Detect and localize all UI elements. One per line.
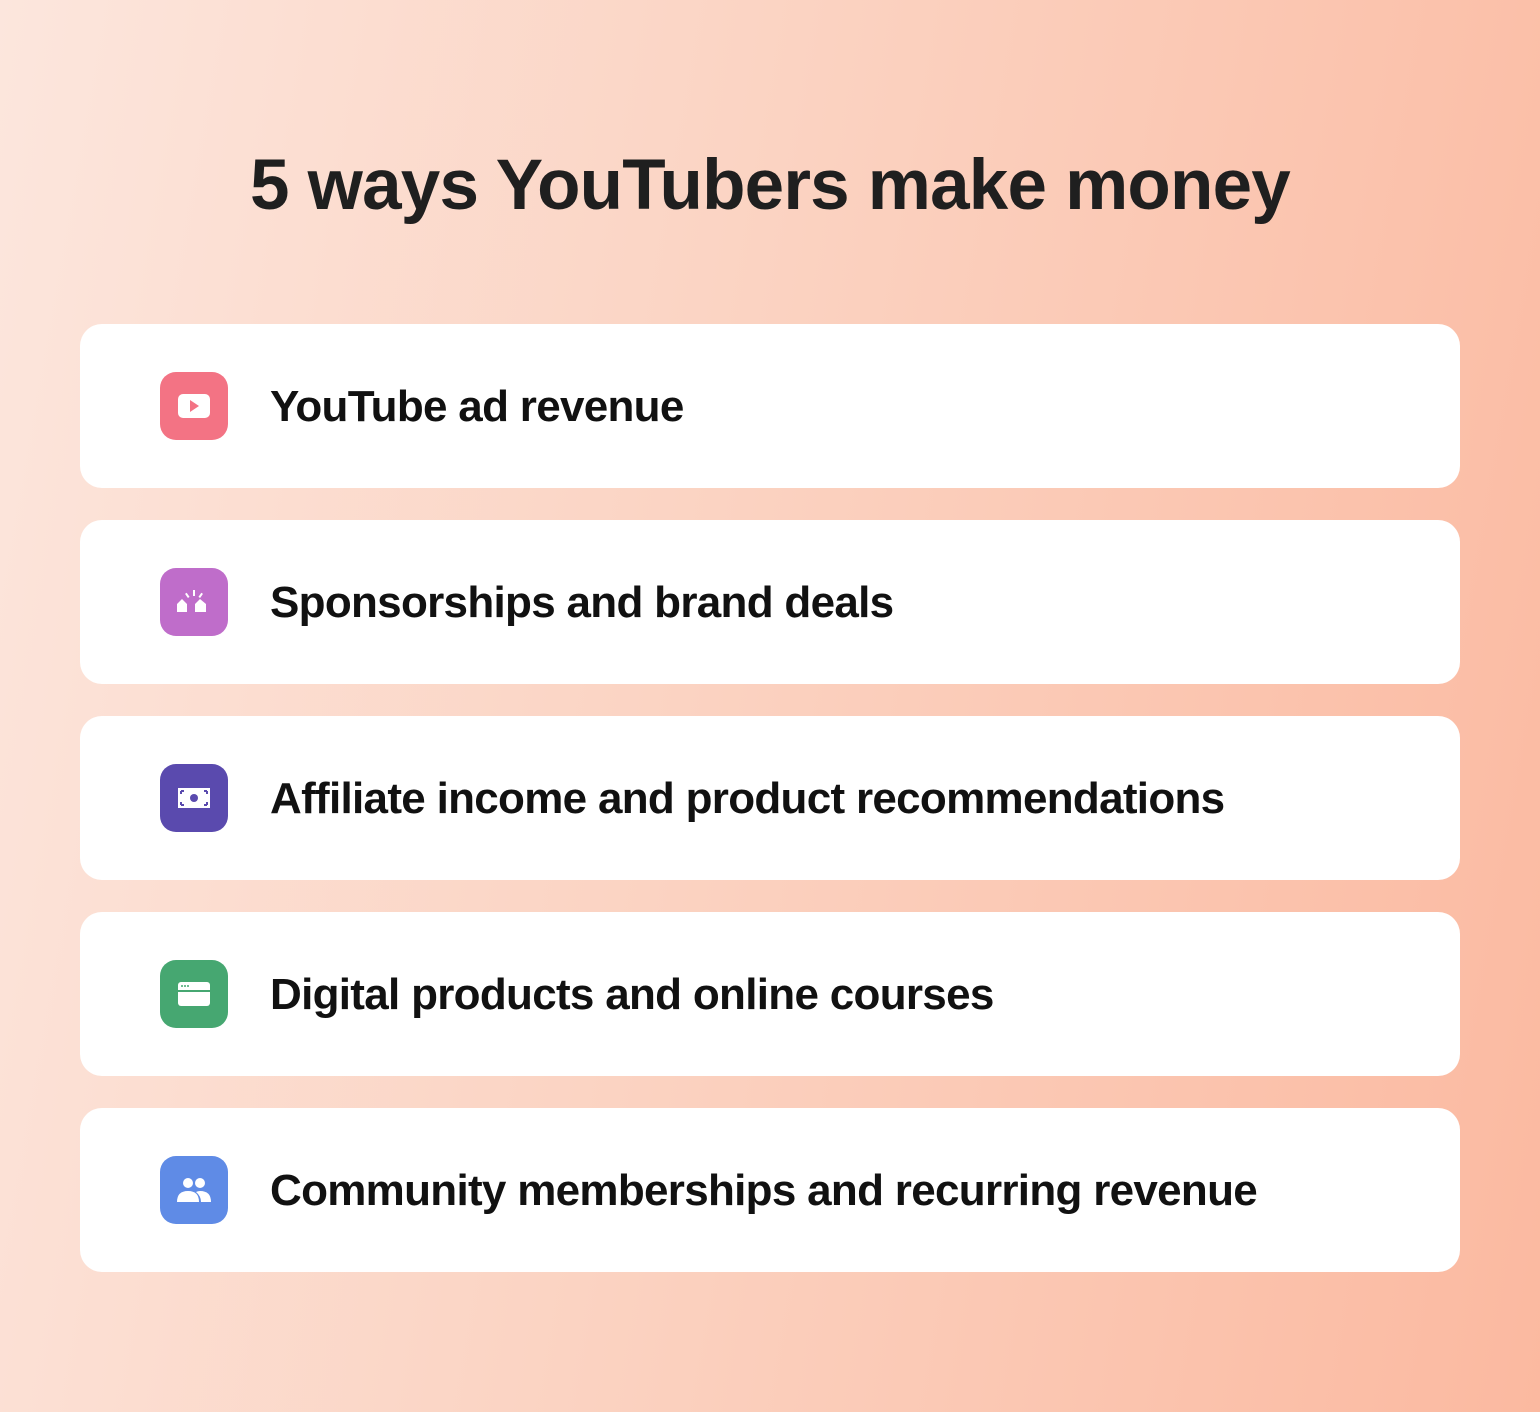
card: digital products xyxy=(80,912,1460,1076)
label: Sponsorships and brand deals xyxy=(270,578,893,627)
icon: play button xyxy=(160,372,228,440)
card: affiliate xyxy=(80,716,1460,880)
card: community xyxy=(80,1108,1460,1272)
label: Digital products and online courses xyxy=(270,970,994,1019)
icon: banknote xyxy=(160,764,228,832)
card: ad revenue xyxy=(80,324,1460,488)
label: Affiliate income and product recommendations xyxy=(270,774,1224,823)
label: YouTube ad revenue xyxy=(270,382,684,431)
label: Community memberships and recurring revenue xyxy=(270,1166,1257,1215)
title: 5 ways YouTubers make money xyxy=(250,146,1290,225)
card: sponsorships xyxy=(80,520,1460,684)
icon: browser window xyxy=(160,960,228,1028)
icon: fist bump xyxy=(160,568,228,636)
icon: people xyxy=(160,1156,228,1224)
